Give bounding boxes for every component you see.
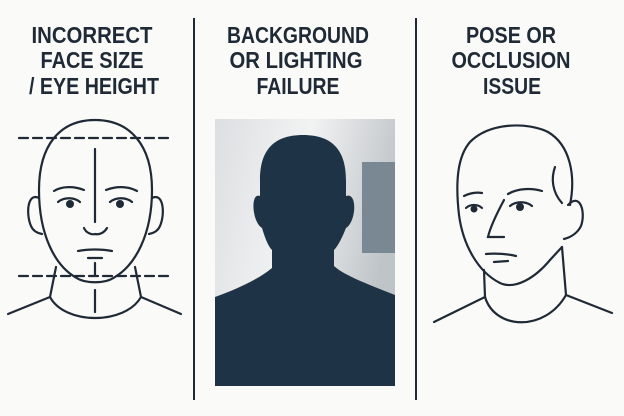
title: pose or occlusion: ISSUE (483, 73, 541, 99)
title: pose or occlusion (452, 22, 570, 99)
title: pose or occlusion: OCCLUSION (452, 47, 570, 73)
title: incorrect face size: / EYE HEIGHT (29, 73, 159, 99)
icon: face with measurement guides (8, 120, 181, 318)
title: background or lighting: FAILURE (256, 73, 340, 99)
dividers (194, 18, 416, 400)
photo: silhouette with poor background (215, 119, 395, 386)
title: background or lighting (227, 22, 369, 99)
silhouette (215, 135, 395, 386)
icon: turned head (434, 125, 612, 322)
title: pose or occlusion: POSE OR (466, 22, 556, 48)
gray block (362, 162, 395, 253)
title: incorrect face size: FACE SIZE (40, 47, 144, 73)
title: incorrect face size (29, 22, 159, 99)
title: background or lighting: BACKGROUND (227, 22, 369, 48)
title: incorrect face size: INCORRECT (32, 22, 152, 48)
title: background or lighting: OR LIGHTING (230, 47, 362, 73)
